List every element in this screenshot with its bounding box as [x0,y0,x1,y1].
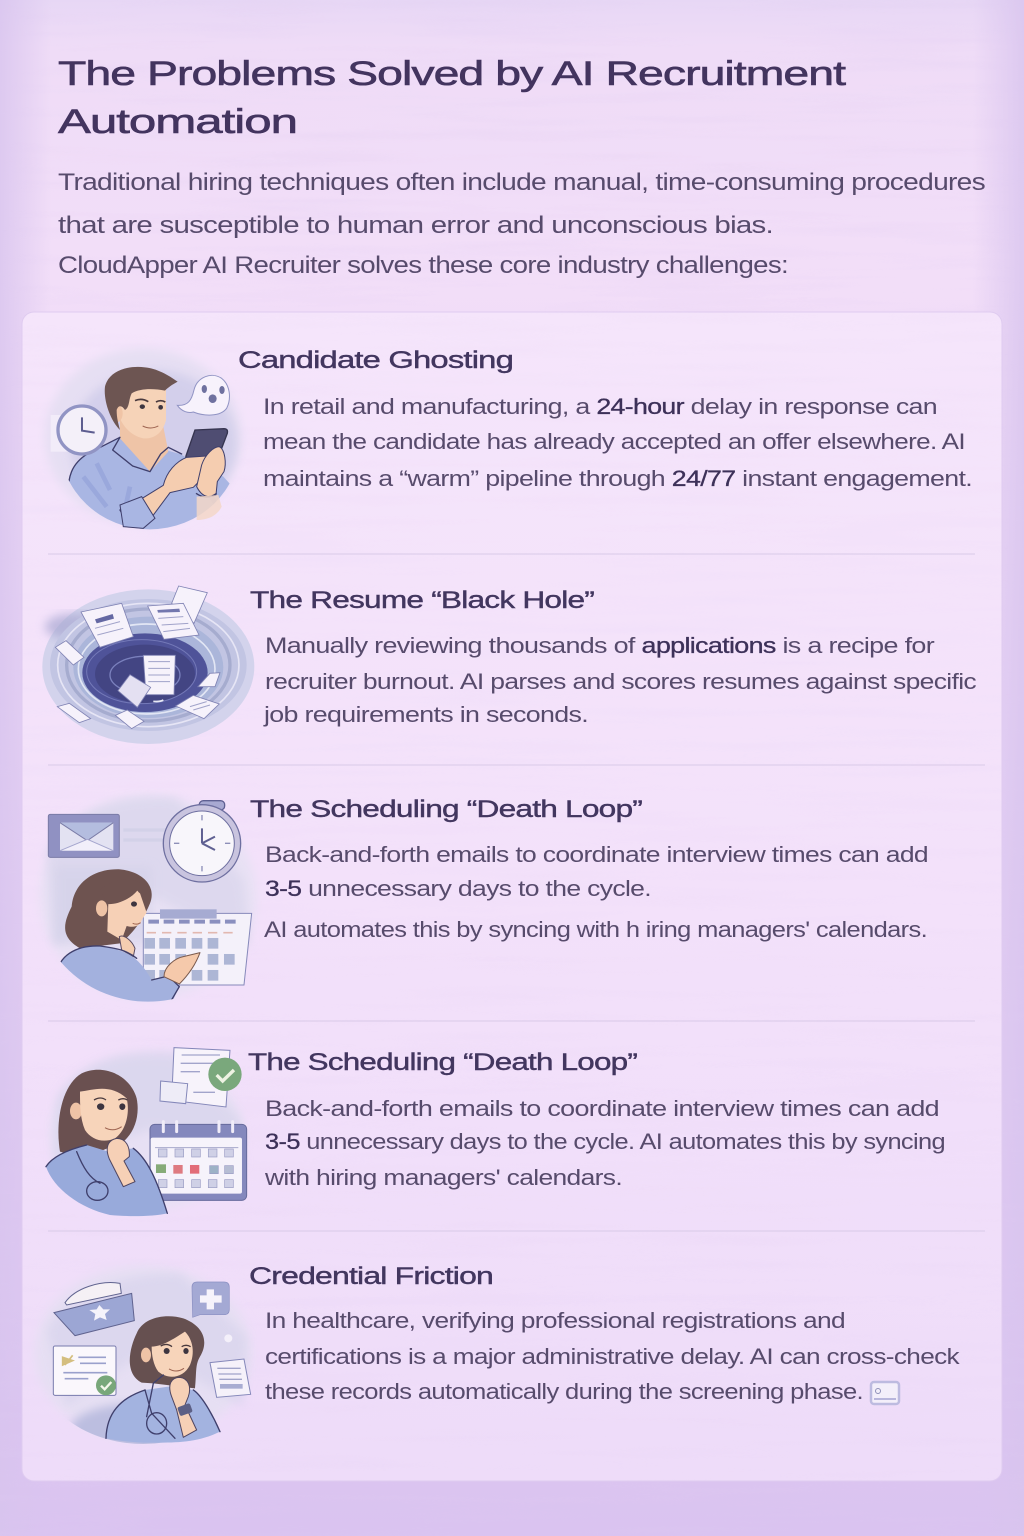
heading: The Scheduling “Death Loop” [248,1049,638,1076]
heading: Credential Friction [249,1263,493,1290]
body text: In healthcare, verifying professional registrations and [265,1308,845,1333]
body text: 3-5 unnecessary days to the cycle. AI automates this by syncing [265,1129,945,1154]
intro text [58,169,986,279]
title: The Problems Solved by AI Recruitment [58,55,847,93]
heading: The Resume “Black Hole” [250,587,595,614]
document [210,1359,251,1397]
body text: mean the candidate has already accepted an offer elsewhere. AI [263,429,965,454]
row: The Scheduling Death Loop, second [46,1048,945,1216]
heading: Candidate Ghosting [238,347,513,374]
intro text: that are susceptible to human error and unconscious bias. [58,212,773,239]
body text: maintains a “warm” pipeline through 24/77 instant engagement. [263,466,972,491]
intro text: Traditional hiring techniques often include manual, time-consuming procedures [58,169,986,196]
title: Automation [58,103,297,141]
woman [57,869,200,1007]
medical speech bubble [192,1282,229,1317]
nurse [106,1316,220,1443]
panel: problems card [22,312,1002,1481]
ghost bubble [177,375,229,415]
row: The Resume Black Hole [42,586,977,744]
icon: woman with calendar and approved document [46,1048,247,1216]
calendar [150,1122,247,1200]
body text: In retail and manufacturing, a 24-hour delay in response can [263,394,937,419]
woman [46,1070,167,1216]
phone and hands [120,429,228,528]
clock [51,406,106,454]
body text: AI automates this by syncing with h iring managers' calendars. [264,917,927,942]
calendar [143,909,252,985]
credential card [53,1346,116,1395]
row: Credential Friction [35,1263,961,1457]
body text [265,1308,961,1404]
icon: resume whirlpool [42,586,254,744]
body text: with hiring managers' calendars. [264,1165,622,1190]
documents [55,586,220,729]
heading: The Scheduling “Death Loop” [250,796,643,823]
body text [263,633,977,727]
intro text: CloudApper AI Recruiter solves these core industry challenges: [58,252,788,279]
row: Candidate Ghosting [45,347,972,533]
body text [263,394,972,491]
body text: certifications is a major administrative delay. AI can cross-check [265,1344,961,1369]
body text [264,1096,945,1190]
row: The Scheduling Death Loop, first [40,795,928,1007]
man [105,367,182,472]
icon: man with phone and ghost [45,348,242,533]
body text: Back-and-forth emails to coordinate interview times can add [265,1096,939,1121]
icon: small window [871,1382,899,1404]
icon: woman, stopwatch and calendar [40,795,257,1007]
title [58,55,847,141]
approved documents [160,1048,242,1107]
body text: Back-and-forth emails to coordinate interview times can add [265,842,928,867]
body text: job requirements in seconds. [263,702,588,727]
body text: 3-5 unnecessary days to the cycle. [265,876,651,901]
body text: recruiter burnout. AI parses and scores resumes against specific [265,669,977,694]
stopwatch [163,801,241,882]
body text: these records automatically during the screening phase. [265,1379,863,1404]
body text: Manually reviewing thousands of applications is a recipe for [265,633,934,658]
icon: nurse with credentials [40,1269,252,1444]
nurse cap [54,1283,134,1336]
body text [264,842,928,942]
envelope [48,814,119,857]
